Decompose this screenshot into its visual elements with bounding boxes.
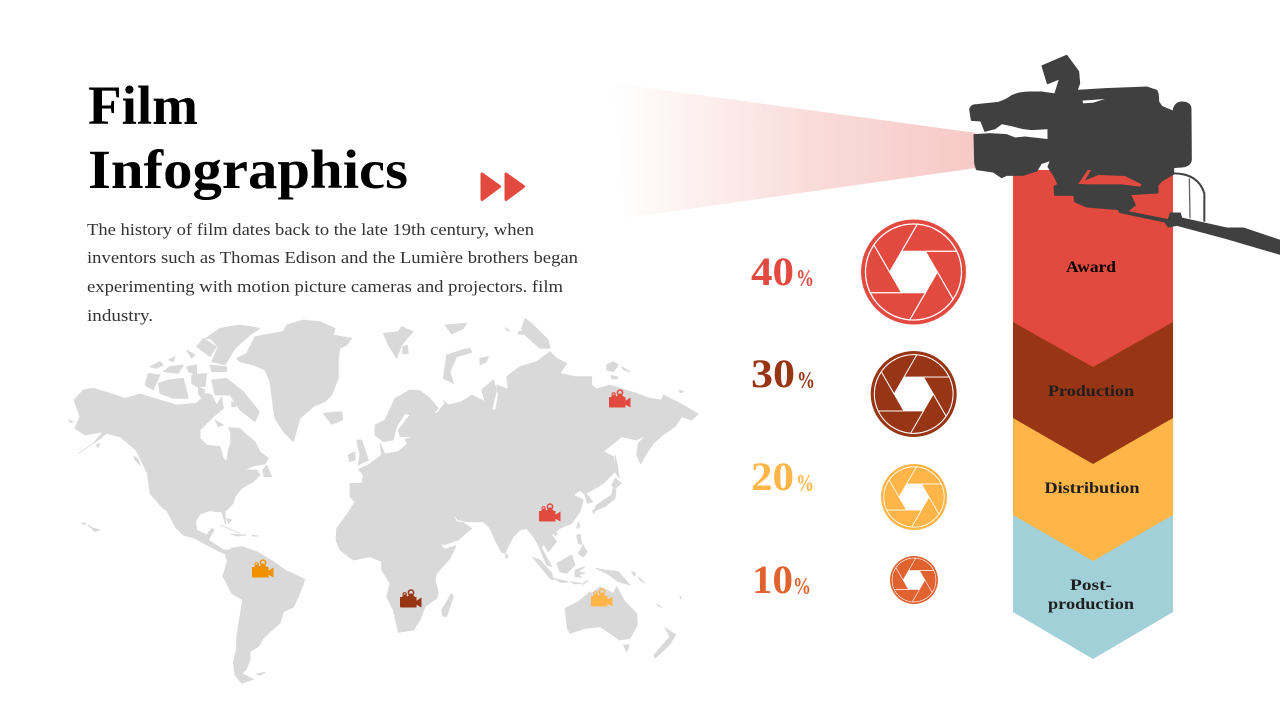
segment: post-production — [1013, 500, 1173, 659]
stat: 20% — [751, 454, 814, 499]
stat: 30%: % — [797, 368, 815, 394]
title: Film — [88, 75, 198, 136]
stat: 40%: 40 — [751, 249, 794, 294]
light beam — [612, 83, 976, 218]
chevron ribbon — [1013, 170, 1173, 659]
map: Arctic Russia and Japan — [443, 318, 684, 536]
stat: 40% — [751, 249, 814, 294]
icon: camera marker China — [539, 504, 560, 522]
ribbon labels: Distribution — [1044, 480, 1140, 497]
map: South America — [223, 547, 305, 683]
world map — [68, 318, 698, 683]
segment: award — [1013, 170, 1173, 367]
segment: distribution — [1013, 400, 1173, 561]
icon: aperture 10% — [885, 552, 943, 608]
map: Southeast Asia and Oceania — [533, 534, 682, 658]
ribbon labels — [1044, 259, 1140, 613]
body text: industry. — [87, 306, 153, 325]
title — [88, 75, 408, 200]
ribbon labels: Production — [1048, 383, 1134, 400]
map: North America — [68, 388, 272, 554]
map: Eurasia and Africa — [336, 352, 698, 632]
map: Svalbard and Franz Josef Land — [383, 323, 467, 358]
icon: camera marker Australia — [591, 589, 612, 606]
body text: inventors such as Thomas Edison and the Lumière brothers began — [87, 248, 579, 267]
icon: aperture 40% — [850, 211, 977, 333]
stat: 10%: 10 — [752, 557, 793, 602]
icon: camera marker South America — [252, 560, 274, 578]
icon: camera marker Africa — [400, 590, 422, 608]
icon: camera marker Russia — [609, 390, 630, 408]
map: Greenland and Arctic Canada — [145, 320, 352, 442]
icon: aperture 20% — [874, 458, 954, 536]
body text — [87, 220, 579, 325]
stat: 20%: % — [796, 471, 814, 497]
ribbon labels: production — [1048, 596, 1134, 613]
segment: production — [1013, 300, 1173, 464]
body text: experimenting with motion picture cameras and projectors. film — [87, 277, 563, 296]
title: Infographics — [88, 139, 408, 200]
stat: 40%: % — [796, 266, 814, 292]
ribbon labels: Award — [1066, 259, 1116, 276]
stat: 20%: 20 — [751, 454, 794, 499]
icon: aperture 30% — [862, 344, 965, 444]
icon: film camera silhouette — [970, 56, 1280, 254]
stat: 30% — [751, 351, 815, 396]
ribbon labels: Post- — [1070, 577, 1112, 594]
body text: The history of film dates back to the late 19th century, when — [87, 220, 535, 239]
icon: fast-forward arrows — [482, 174, 524, 200]
stat: 30%: 30 — [751, 351, 795, 396]
stat: 10%: % — [793, 574, 811, 600]
percentages — [751, 249, 815, 602]
stat: 10% — [752, 557, 811, 602]
